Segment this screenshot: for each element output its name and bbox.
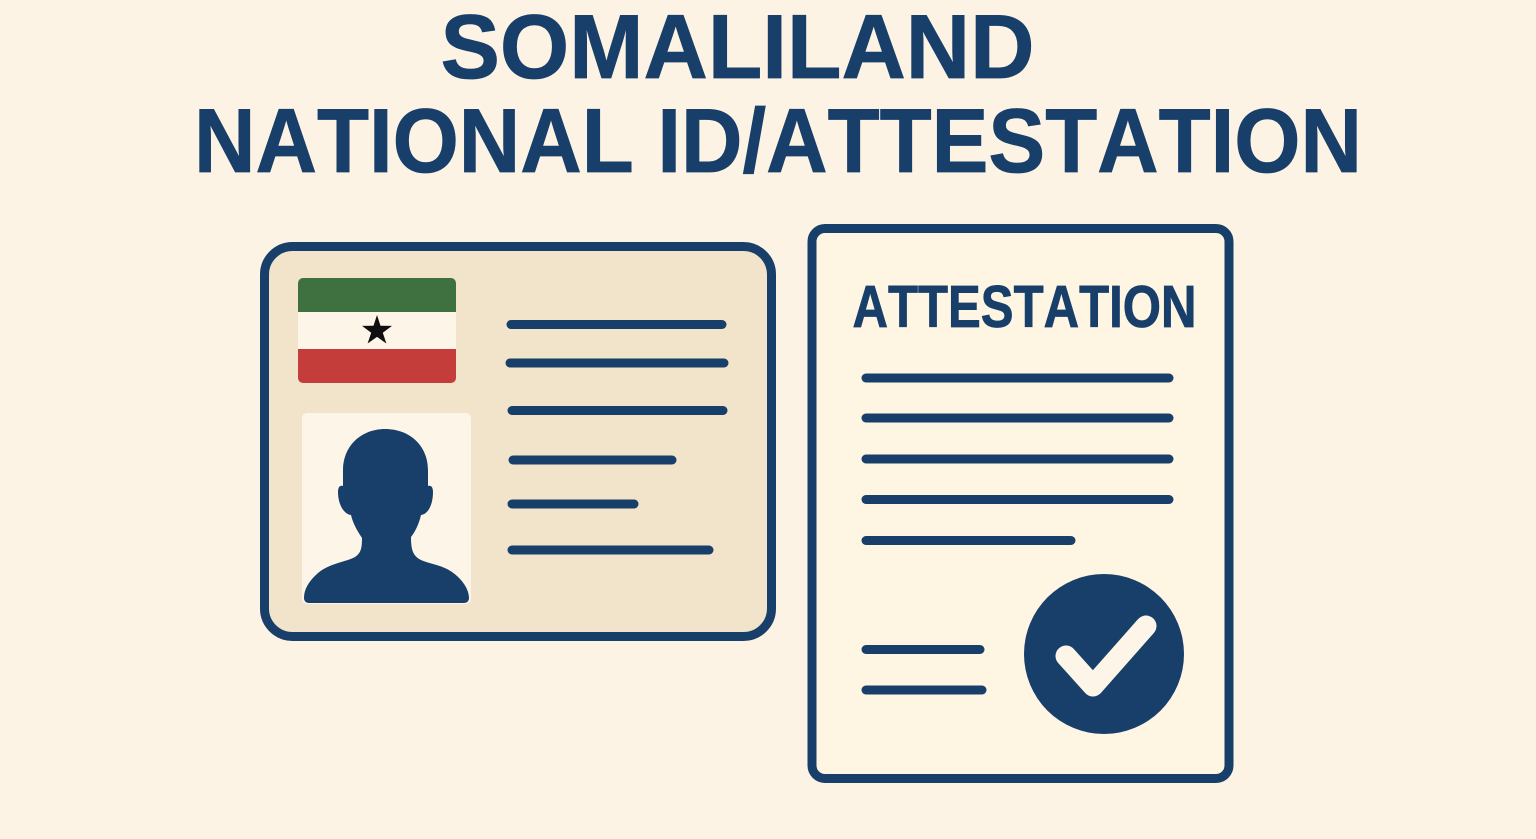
panel: attestation document	[812, 228, 1229, 778]
icon: check seal	[1024, 574, 1184, 734]
panel: ID card	[264, 246, 772, 636]
heading: attestation: ATTESTATION	[852, 274, 1196, 340]
icon: flag	[298, 278, 456, 383]
text lines on document	[866, 378, 1169, 690]
photo with silhouette	[302, 413, 471, 604]
title: NATIONAL ID/ATTESTATION	[194, 91, 1362, 192]
text lines on ID card	[510, 324, 724, 550]
title	[194, 0, 1362, 192]
title: SOMALILAND	[440, 0, 1034, 98]
